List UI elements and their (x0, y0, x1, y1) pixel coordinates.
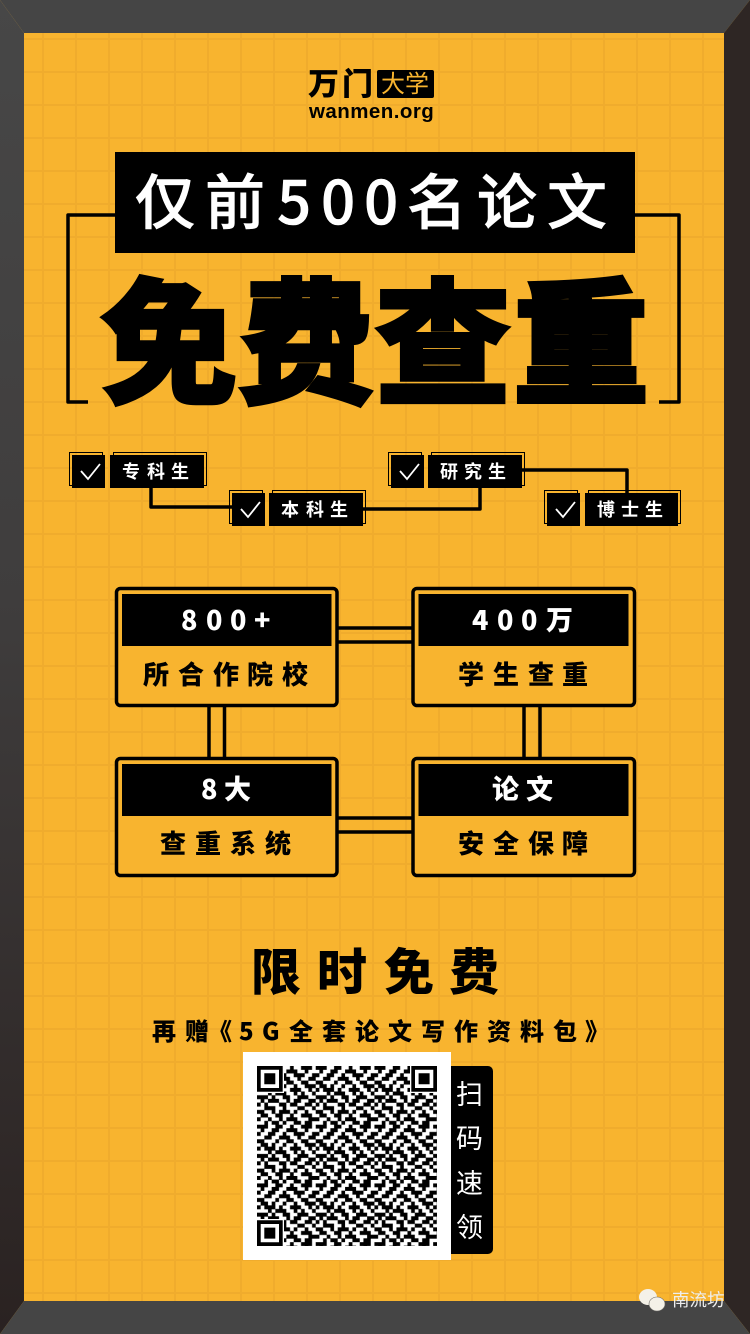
tag: 本科生 (230, 490, 366, 526)
stat: 论文 安全保障: 论文 (492, 768, 553, 807)
logo: wanmen university: 大学 (381, 64, 429, 99)
headline: 免费查重 (101, 236, 649, 433)
logo: wanmen university: 万门 (308, 59, 373, 104)
scan tab: 扫 (456, 1073, 483, 1112)
stat: 论文 安全保障 (413, 758, 634, 876)
logo: wanmen university: wanmen.org (308, 100, 434, 123)
stat: 400万 学生查重: 400万 (472, 599, 573, 638)
stat: 8大 查重系统 (116, 758, 337, 876)
watermark (639, 1287, 724, 1312)
scan tab: 码 (456, 1117, 483, 1156)
stat: 800+ 所合作院校: 800+ (181, 599, 270, 638)
tag: 研究生: 研究生 (440, 458, 506, 484)
gift line: 再赠《5G全套论文写作资料包》 (152, 1012, 609, 1047)
tag: 博士生: 博士生 (597, 496, 663, 522)
education level connectors (151, 470, 627, 509)
scan tab (451, 1066, 493, 1254)
qr code (243, 1052, 451, 1260)
tag: 研究生 (388, 452, 524, 488)
logo: wanmen university (308, 59, 434, 123)
tag: 专科生 (70, 452, 206, 488)
tag: 博士生 (544, 490, 680, 526)
stat: 800+ 所合作院校: 所合作院校 (143, 655, 308, 692)
stat: 8大 查重系统: 8大 (201, 768, 251, 807)
stat: 8大 查重系统: 查重系统 (160, 824, 291, 861)
title bracket (68, 215, 679, 402)
tag: 本科生: 本科生 (281, 496, 348, 522)
watermark: 南流坊 (672, 1287, 724, 1312)
stat: 800+ 所合作院校 (116, 588, 337, 706)
tag: 专科生: 专科生 (122, 458, 189, 484)
scan tab: 领 (456, 1206, 483, 1245)
scan tab: 速 (456, 1162, 483, 1201)
title banner: 仅前500名论文 (135, 155, 607, 242)
limited time heading: 限时免费 (251, 933, 499, 1005)
stat: 400万 学生查重 (413, 588, 634, 706)
stat box connectors (209, 628, 540, 832)
stat: 400万 学生查重: 学生查重 (458, 655, 588, 692)
stat: 论文 安全保障: 安全保障 (458, 824, 588, 861)
